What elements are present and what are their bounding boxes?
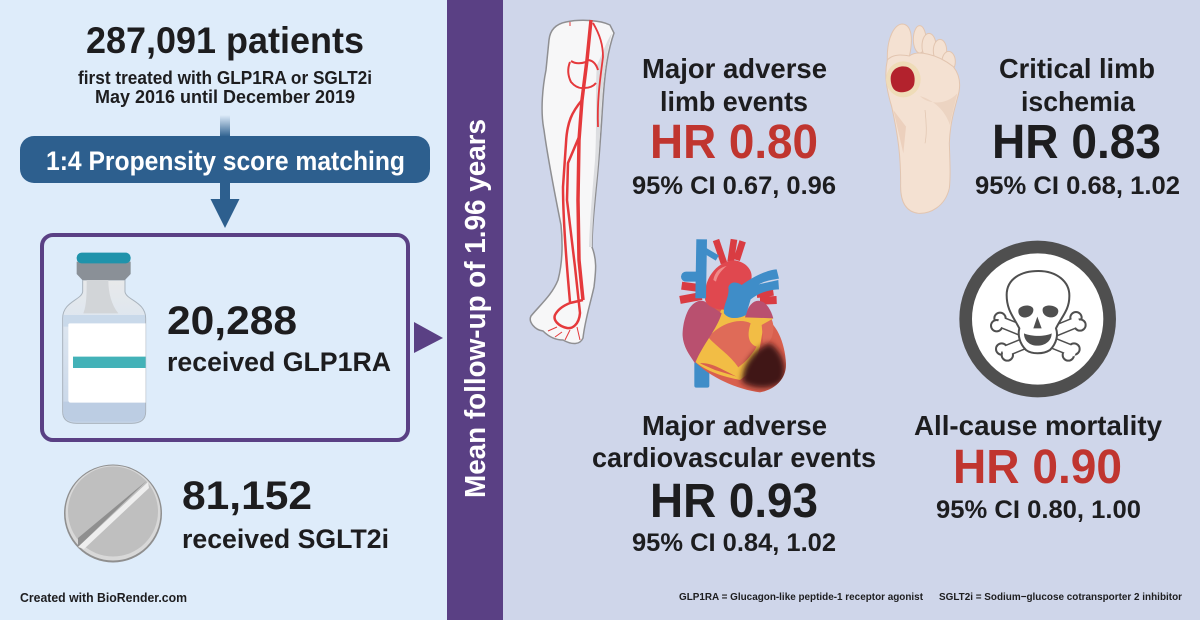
confidence interval: 95% CI 0.67, 0.96: [632, 172, 836, 200]
icon: leg with arteries: [530, 20, 614, 344]
callout: propensity score matching: 1:4 Propensity score matching: [46, 146, 405, 176]
band: follow-up: [447, 0, 503, 620]
heading: patient count: [78, 20, 372, 107]
cohort description: first treated with GLP1RA or SGLT2i: [78, 68, 372, 88]
text: major adverse limb events: Major adverse: [642, 53, 827, 84]
confidence interval: 95% CI 0.84, 1.02: [632, 529, 836, 557]
text: major adverse cardiovascular events: cardiovascular events: [592, 442, 876, 473]
text: major adverse limb events: limb events: [660, 86, 808, 117]
panel: GLP1RA cohort: [42, 235, 408, 440]
footnote: abbreviations: [679, 591, 1182, 603]
SGLT2i label: received SGLT2i: [182, 524, 389, 554]
text: major adverse cardiovascular events: [592, 410, 876, 557]
cohort description: [78, 68, 372, 107]
GLP1RA label: received GLP1RA: [167, 347, 391, 377]
credit: Created with BioRender.com: [20, 590, 187, 605]
icon: skull and crossbones: [966, 247, 1110, 391]
text: major adverse cardiovascular events: Major adverse: [642, 410, 827, 441]
text: major adverse limb events: [632, 53, 836, 200]
GLP1RA count: 20,288: [167, 299, 297, 343]
hazard ratio: HR 0.83: [992, 116, 1161, 169]
arrow: to outcomes: [414, 322, 443, 353]
icon: tablet: [64, 464, 162, 562]
panel: study population: [0, 0, 447, 620]
panel: outcomes: [503, 0, 1200, 620]
hazard ratio: HR 0.80: [650, 116, 818, 169]
hazard ratio: HR 0.93: [650, 475, 818, 528]
arrow: down to cohorts: [210, 183, 240, 228]
icon: foot with ulcer: [886, 24, 960, 213]
panel: SGLT2i cohort: [64, 464, 389, 562]
footnote: abbreviations: GLP1RA = Glucagon-like peptide-1 receptor agonist: [679, 591, 923, 603]
hazard ratio: HR 0.90: [953, 441, 1122, 494]
confidence interval: 95% CI 0.68, 1.02: [975, 172, 1180, 200]
callout: propensity score matching: [20, 136, 430, 183]
text: critical limb ischemia: Critical limb: [999, 53, 1155, 84]
confidence interval: 95% CI 0.80, 1.00: [936, 496, 1141, 524]
heading: patient count: 287,091 patients: [86, 20, 364, 61]
band label: Mean follow-up of 1.96 years: [460, 119, 492, 498]
icon: heart with infarct: [680, 239, 786, 392]
text: critical limb ischemia: [975, 53, 1180, 200]
icon: vial: [63, 253, 146, 423]
SGLT2i count: 81,152: [182, 474, 312, 518]
text: all-cause mortality: [914, 410, 1162, 524]
cohort description: May 2016 until December 2019: [95, 87, 355, 107]
footnote: abbreviations: SGLT2i = Sodium−glucose cotransporter 2 inhibitor: [939, 591, 1182, 603]
text: all-cause mortality: All-cause mortality: [914, 410, 1162, 441]
text: critical limb ischemia: ischemia: [1021, 86, 1135, 117]
arrow: fading connector: [220, 115, 230, 137]
